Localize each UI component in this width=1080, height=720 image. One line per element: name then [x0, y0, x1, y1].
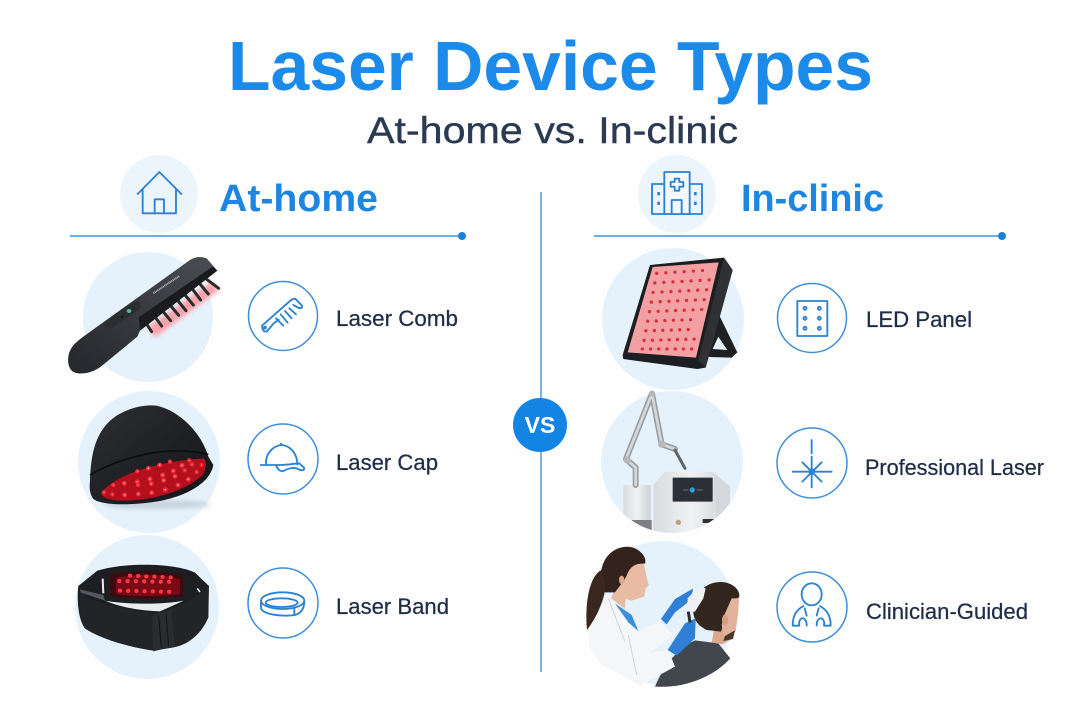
in-clinic heading: In-clinic: [741, 178, 884, 220]
icon: LED panel: [778, 284, 846, 352]
photo: laser comb: [68, 252, 219, 382]
row: LED panel: [602, 248, 972, 390]
icon: comb: [248, 282, 318, 350]
header rule: [70, 232, 466, 240]
row: laser cap: [78, 391, 438, 533]
icon: hospital: [638, 155, 716, 233]
in-clinic header: [594, 155, 1006, 240]
icon: cap: [248, 424, 318, 494]
label: professional laser: Professional Laser: [865, 455, 1044, 480]
row: clinician-guided: [586, 541, 1028, 687]
title: Laser Device Types: [228, 27, 873, 105]
VS badge: [513, 398, 567, 452]
photo: professional laser: [601, 391, 743, 542]
photo: laser band: [75, 535, 219, 679]
panel: at-home column: [68, 155, 466, 679]
row: laser band: [75, 535, 449, 679]
photo: laser cap: [78, 391, 220, 533]
label: clinician-guided: Clinician-Guided: [866, 599, 1028, 624]
label: laser band: Laser Band: [336, 594, 449, 619]
photo: clinician treating patient: [586, 541, 739, 687]
icon: band: [248, 568, 318, 638]
header rule: [594, 232, 1006, 240]
subtitle: At-home vs. In-clinic: [367, 110, 738, 151]
label: laser cap: Laser Cap: [336, 450, 438, 475]
label: laser comb: Laser Comb: [336, 306, 458, 331]
panel: in-clinic column: [586, 155, 1044, 687]
center divider with VS badge: [513, 192, 567, 672]
at-home header: [70, 155, 466, 240]
label: LED panel: LED Panel: [866, 307, 972, 332]
VS badge: VS: [525, 412, 555, 438]
at-home heading: At-home: [219, 178, 378, 220]
row: professional laser: [601, 391, 1044, 542]
icon: clinician: [777, 572, 847, 642]
photo: LED panel: [602, 248, 744, 390]
row: laser comb: [68, 252, 458, 382]
icon: laser burst: [777, 428, 847, 498]
icon: house: [120, 155, 198, 233]
